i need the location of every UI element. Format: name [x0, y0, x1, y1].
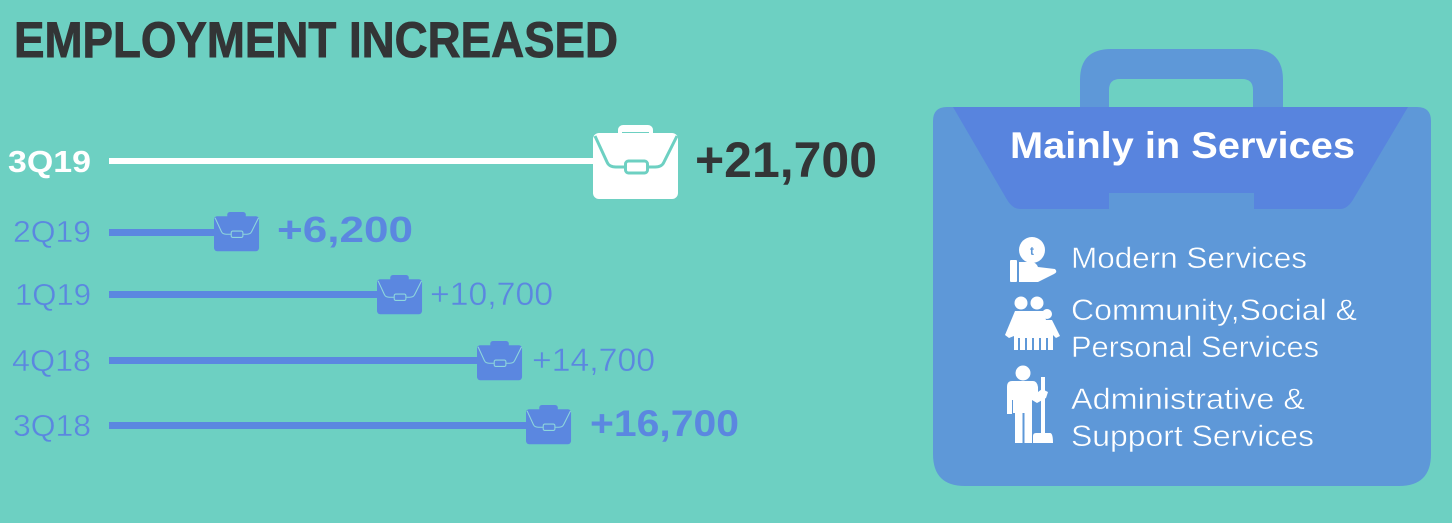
row: 3Q19: 3Q19	[8, 144, 91, 179]
panel: services briefcase	[933, 49, 1431, 486]
row: 1Q19: 1Q19	[15, 277, 91, 312]
item: administrative services: Support Services	[1071, 420, 1314, 453]
icon: cleaner with mop	[1007, 366, 1053, 443]
row: 4Q18	[12, 341, 655, 380]
icon: hand holding coin	[1010, 237, 1056, 282]
row: 3Q18: +16,700	[590, 403, 739, 444]
icon: briefcase	[214, 212, 259, 251]
item: administrative services: Administrative &	[1071, 383, 1305, 416]
row: 2Q19: +6,200	[277, 209, 413, 250]
item: modern services	[1010, 237, 1307, 282]
row: 3Q18: 3Q18	[13, 408, 91, 443]
item: community services: Community,Social &	[1071, 294, 1357, 327]
row: 2Q19: 2Q19	[13, 214, 91, 249]
icon: family	[1005, 296, 1060, 350]
briefcase handle	[1080, 49, 1283, 110]
briefcase flap	[953, 107, 1408, 209]
row: 1Q19	[15, 275, 553, 314]
icon: briefcase	[377, 275, 422, 314]
item: community services	[1005, 294, 1357, 364]
title: EMPLOYMENT INCREASED	[14, 12, 618, 68]
row: 1Q19: +10,700	[430, 276, 553, 312]
briefcase body	[933, 107, 1431, 486]
icon: white briefcase	[593, 125, 678, 199]
item: community services: Personal Services	[1071, 331, 1319, 364]
item: administrative services	[1007, 366, 1314, 453]
icon: briefcase	[477, 341, 522, 380]
row: 4Q18: 4Q18	[12, 343, 91, 378]
item: modern services: Modern Services	[1071, 242, 1307, 275]
panel heading: Mainly in Services	[1010, 125, 1355, 166]
row: 3Q19: +21,700	[695, 132, 877, 188]
icon: hand holding coin: t	[1030, 244, 1034, 258]
row: 2Q19	[13, 209, 413, 251]
row: 4Q18: +14,700	[532, 342, 655, 378]
timeline chart	[8, 125, 877, 444]
row: 3Q18	[13, 403, 739, 444]
row: 3Q19	[8, 125, 877, 199]
icon: briefcase	[526, 405, 571, 444]
